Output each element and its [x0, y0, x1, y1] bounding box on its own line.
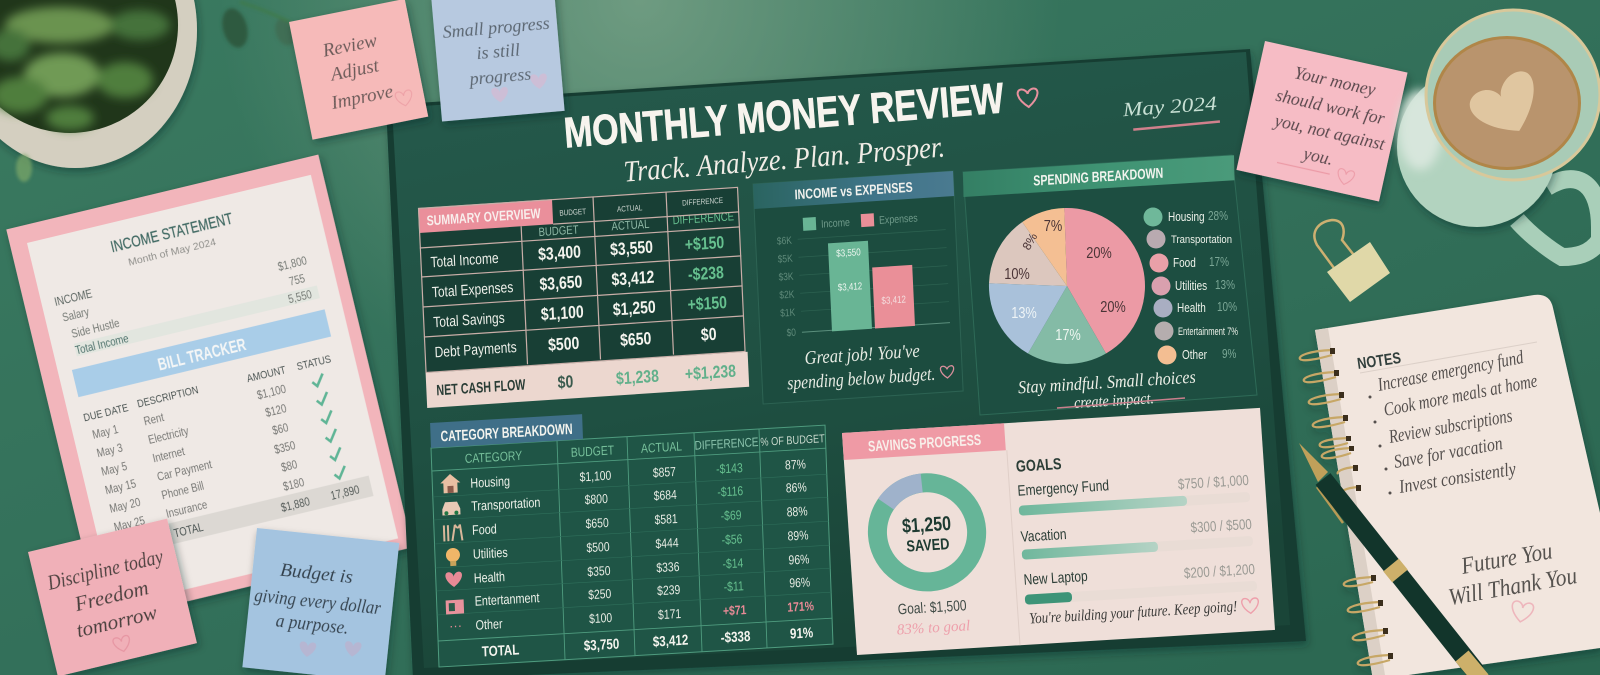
spending legend: Other: [1182, 349, 1207, 362]
category values: $857: [653, 465, 676, 481]
category column headings: DIFFERENCE: [694, 436, 759, 453]
net cash flow row: NET CASH FLOW: [436, 376, 526, 399]
goals list: New Laptop: [1023, 568, 1088, 588]
date: May 2024: [1121, 93, 1217, 121]
category total row: 91%: [790, 624, 814, 642]
summary values: $3,412: [611, 268, 655, 290]
bill table: May 1: [91, 423, 120, 442]
spending legend: 13%: [1215, 279, 1235, 292]
bill table: AMOUNT: [246, 364, 288, 385]
savings donut: SAVED: [906, 536, 950, 556]
future you note: Will Thank You: [1447, 563, 1579, 611]
summary values: +$150: [684, 234, 725, 255]
category labels: Housing: [470, 473, 510, 491]
title: MONTHLY MONEY REVIEW: [562, 74, 1006, 158]
income rows: Salary: [61, 306, 91, 325]
savings donut: $1,250: [901, 512, 952, 537]
goals list: Emergency Fund: [1017, 477, 1110, 499]
spending legend: 17%: [1209, 256, 1229, 269]
bill table: $1,100: [256, 383, 287, 402]
income rows: Side Hustle: [70, 317, 121, 341]
category column headings: CATEGORY: [465, 449, 523, 466]
category column headings: [465, 431, 826, 466]
category values: 89%: [787, 528, 809, 544]
spending legend: Utilities: [1175, 280, 1207, 293]
category column headings: BUDGET: [571, 443, 614, 460]
savings note: You're building your future. Keep going!: [1029, 598, 1238, 628]
category column headings: % OF BUDGET: [760, 433, 826, 449]
spending legend: Entertainment 7%: [1178, 326, 1238, 338]
category values: $100: [589, 611, 613, 627]
bill table: Car Payment: [156, 458, 213, 484]
spending legend: 28%: [1208, 210, 1228, 223]
spending legend: Food: [1173, 257, 1196, 270]
coffee cup: [1397, 10, 1600, 257]
spending header: [963, 155, 1234, 197]
bill table: STATUS: [296, 354, 332, 373]
bill table: Phone Bill: [160, 480, 205, 503]
bill table: DUE DATE: [82, 402, 130, 425]
category values: -$56: [721, 532, 743, 548]
status checks: [311, 374, 347, 479]
bill table: $350: [273, 439, 297, 457]
category values: 88%: [787, 504, 808, 520]
goals list: $750 / $1,000: [1177, 472, 1249, 492]
category values: -$143: [716, 461, 743, 477]
spiral binding: [1300, 348, 1393, 665]
percent to goal: 83% to goal: [896, 618, 971, 639]
spending note: create impact.: [1074, 390, 1154, 412]
board face: [392, 52, 1290, 668]
summary rows: Total Savings: [433, 309, 505, 331]
category values: $684: [653, 488, 677, 504]
summary rows: [430, 249, 517, 361]
sticky note: budget: giving every dollar: [253, 585, 382, 619]
category values: $350: [587, 564, 611, 580]
future you note: Future You: [1458, 538, 1554, 580]
category header: CATEGORY BREAKDOWN: [440, 421, 573, 445]
bill table: DESCRIPTION: [136, 384, 200, 411]
paper: income statement and bill tracker: [6, 155, 413, 622]
sticky note: budget: Budget is: [279, 560, 354, 588]
bill table: $120: [264, 402, 288, 420]
notes list: Cook more meals at home: [1382, 371, 1539, 421]
savings heart: [1241, 598, 1259, 614]
income rows: 5,550: [287, 288, 313, 307]
bill table: TOTAL: [173, 521, 205, 541]
net cash flow row: [426, 352, 749, 408]
sticky note: small progress: progress: [467, 64, 532, 89]
encouragement note: Great job! You've: [804, 341, 921, 369]
savings goal text: Goal: $1,500: [897, 597, 967, 618]
category total row: $3,750: [584, 635, 620, 654]
summary column headings: BUDGET: [538, 224, 579, 239]
panel: savings progress: [842, 408, 1275, 655]
goals list: $200 / $1,200: [1183, 561, 1255, 581]
category values: 96%: [789, 575, 811, 591]
summary values: -$238: [688, 264, 724, 285]
income chart header: [753, 171, 954, 209]
category values: $444: [655, 536, 679, 552]
summary values: [538, 234, 729, 356]
category header: [430, 414, 583, 448]
sticky note: discipline: Freedom: [71, 575, 151, 616]
summary rows: Debt Payments: [434, 339, 517, 361]
income statement month: Month of May 2024: [127, 237, 217, 269]
encouragement note: spending below budget.: [787, 364, 936, 394]
panel: summary overview: [418, 187, 749, 408]
title heart: [1017, 88, 1039, 108]
category icons: ···: [449, 618, 462, 633]
income chart header: INCOME vs EXPENSES: [794, 179, 913, 202]
spending header: SPENDING BREAKDOWN: [1033, 166, 1163, 190]
bar chart: $3,412: [838, 280, 862, 293]
category total row: [481, 624, 814, 660]
category values: +$71: [723, 603, 747, 619]
bar chart: $3,550: [836, 246, 861, 259]
chart legend: Expenses: [879, 213, 918, 227]
sticky note: discipline: [28, 519, 197, 675]
bill table: May 25: [113, 514, 146, 535]
spending legend: Health: [1177, 302, 1206, 315]
category labels: Entertanment: [474, 590, 540, 609]
pie chart: 20%: [1086, 245, 1112, 262]
sticky note: your money: [1236, 41, 1408, 201]
chart legend: [803, 210, 918, 232]
summary column headings: DIFFERENCE: [672, 210, 734, 228]
sticky note: review: Improve: [329, 81, 395, 114]
future you note: [1447, 538, 1579, 611]
summary header: SUMMARY OVERVIEW: [426, 205, 542, 228]
subtitle: Track. Analyze. Plan. Prosper.: [622, 130, 946, 189]
grid lines: [431, 425, 833, 667]
bill table: May 5: [100, 460, 129, 479]
sticky note: your money: you.: [1300, 143, 1335, 169]
pie chart: 13%: [1011, 305, 1037, 322]
sticky note: small progress: is still: [476, 40, 521, 63]
spending legend: 9%: [1222, 348, 1236, 361]
income rows: Total Income: [74, 332, 130, 358]
bill table: 17,890: [329, 483, 361, 503]
category values: $500: [586, 540, 610, 556]
pie chart: [989, 208, 1145, 364]
spending note: [1017, 367, 1197, 415]
sticky note: discipline: Discipline today: [44, 544, 166, 595]
pie chart: 8%: [1019, 230, 1040, 253]
pen: [1299, 443, 1482, 675]
category total row: -$338: [720, 628, 751, 646]
bill table: Electricity: [147, 425, 190, 447]
bar chart: $5K: [777, 253, 794, 266]
notes list: Review subscriptions: [1386, 406, 1514, 448]
category labels: Transportation: [471, 495, 541, 514]
sticky note: your money: Your money: [1293, 62, 1378, 100]
income statement heading: INCOME STATEMENT: [109, 211, 235, 256]
net cash flow row: $1,238: [616, 367, 659, 389]
summary values: $3,650: [539, 273, 583, 295]
goals list: GOALS: [1015, 456, 1062, 476]
category labels: Other: [475, 616, 503, 633]
bill table: $60: [271, 421, 290, 438]
summary column headings: [537, 195, 734, 239]
bar chart: $3,412: [881, 294, 906, 306]
savings header: [842, 423, 1006, 460]
category values: $581: [654, 512, 678, 528]
category values: $650: [585, 516, 609, 532]
goals list: $300 / $500: [1190, 516, 1252, 536]
category values: $239: [657, 583, 681, 599]
notes list: Invest consistently: [1397, 459, 1518, 498]
spending legend: [1144, 208, 1238, 364]
bill tracker banner: [72, 309, 331, 397]
category labels: Food: [472, 521, 497, 538]
category values: -$116: [717, 484, 744, 500]
category values: -$69: [720, 508, 742, 524]
chart legend: Income: [821, 217, 851, 231]
category values: 96%: [788, 552, 810, 568]
category labels: Health: [474, 569, 505, 586]
binder clip: [1314, 220, 1390, 302]
sticky note: small progress: [431, 0, 565, 122]
category values: $336: [656, 560, 680, 576]
income rows: [53, 236, 320, 360]
sticky note: your money: you, not against: [1271, 110, 1388, 154]
category values: -$14: [722, 556, 744, 572]
spending legend: 10%: [1217, 301, 1237, 314]
category values: $1,100: [579, 469, 612, 485]
notebook: [1300, 295, 1600, 675]
pie chart: 7%: [1044, 218, 1062, 235]
summary column headings: BUDGET: [559, 206, 587, 218]
net cash flow row: +$1,238: [685, 362, 737, 384]
spending legend: Transportation: [1171, 234, 1232, 246]
bar chart: $3K: [778, 271, 794, 284]
pie chart: 17%: [1055, 327, 1081, 344]
category values: 86%: [786, 480, 807, 496]
bar chart: $1K: [780, 307, 796, 320]
panel: spending breakdown: [963, 155, 1257, 415]
bar chart: $2K: [779, 289, 795, 302]
pie chart: 10%: [1004, 266, 1030, 283]
savings header: SAVINGS PROGRESS: [867, 432, 982, 455]
category values: [579, 457, 815, 627]
category values: $800: [584, 492, 608, 508]
sticky note: review: Adjust: [327, 55, 381, 86]
sticky note: your money: should work for: [1274, 85, 1387, 128]
category labels: [470, 472, 545, 633]
summary header: [418, 199, 553, 233]
category icons: [440, 473, 466, 634]
pie chart: 20%: [1100, 299, 1126, 316]
bill tracker banner: BILL TRACKER: [156, 334, 248, 374]
category total row: TOTAL: [481, 641, 520, 660]
notes list: Save for vacation: [1392, 433, 1504, 473]
main board: [386, 49, 1306, 675]
notes heading: NOTES: [1356, 350, 1403, 373]
bill table: May 15: [104, 477, 138, 498]
panel: category breakdown: [430, 400, 833, 667]
bill table: $1,880: [280, 495, 311, 515]
spending legend: Housing: [1168, 211, 1205, 224]
sticky note: review: Review: [320, 30, 379, 62]
summary values: +$150: [687, 294, 728, 315]
savings donut: [874, 480, 980, 585]
date: [1121, 93, 1220, 130]
bar chart: [777, 225, 950, 340]
notebook heart: [1510, 600, 1534, 624]
income rows: 755: [288, 272, 306, 289]
category column headings: ACTUAL: [641, 439, 683, 456]
income rows: INCOME: [53, 287, 94, 309]
encouragement note: [786, 340, 936, 394]
bill table: $180: [282, 476, 306, 494]
summary values: $500: [548, 334, 580, 355]
category total row: $3,412: [653, 631, 689, 650]
net cash flow row: $0: [557, 373, 574, 393]
sticky note: budget: a purpose.: [275, 611, 350, 639]
bill table: Rent: [143, 411, 165, 429]
income rows: $1,800: [277, 254, 308, 274]
panel: income vs expenses: [753, 171, 963, 404]
summary column headings: DIFFERENCE: [682, 195, 723, 208]
category labels: Utilities: [473, 545, 508, 562]
summary column headings: ACTUAL: [611, 218, 650, 234]
sticky note: discipline: tomorrow: [74, 600, 159, 642]
goals list: Vacation: [1020, 526, 1067, 545]
bill table: May 3: [96, 442, 124, 461]
bar chart: $0: [786, 327, 796, 340]
sticky note: budget: [242, 528, 399, 675]
summary values: $650: [620, 330, 652, 351]
note heart: [940, 366, 954, 378]
summary values: $1,100: [540, 303, 584, 325]
summary rows: Total Expenses: [432, 279, 514, 301]
sticky note: review: [289, 0, 428, 140]
bar chart: $6K: [777, 235, 793, 248]
bill table: $80: [280, 458, 299, 475]
goals list: [1015, 445, 1257, 605]
category values: 171%: [787, 599, 815, 615]
notes list: [1368, 347, 1539, 498]
summary values: $3,550: [610, 238, 654, 260]
summary values: $3,400: [538, 243, 582, 265]
category values: $171: [658, 607, 681, 623]
bill table: Internet: [151, 445, 186, 466]
notes list: Increase emergency fund: [1375, 347, 1526, 396]
summary rows: Total Income: [430, 250, 499, 271]
spending note: Stay mindful. Small choices: [1017, 367, 1196, 397]
category values: -$11: [723, 579, 744, 595]
note underline: [1057, 398, 1185, 408]
category values: 87%: [785, 457, 807, 473]
potted plant: [0, 0, 298, 182]
sticky note: small progress: Small progress: [442, 13, 550, 42]
category values: $250: [588, 587, 612, 603]
bill table: May 20: [108, 496, 142, 516]
summary values: $0: [701, 325, 717, 345]
bill table: Insurance: [165, 498, 209, 521]
summary values: $1,250: [612, 298, 656, 320]
summary column headings: ACTUAL: [617, 203, 643, 214]
bill table: [82, 350, 374, 558]
